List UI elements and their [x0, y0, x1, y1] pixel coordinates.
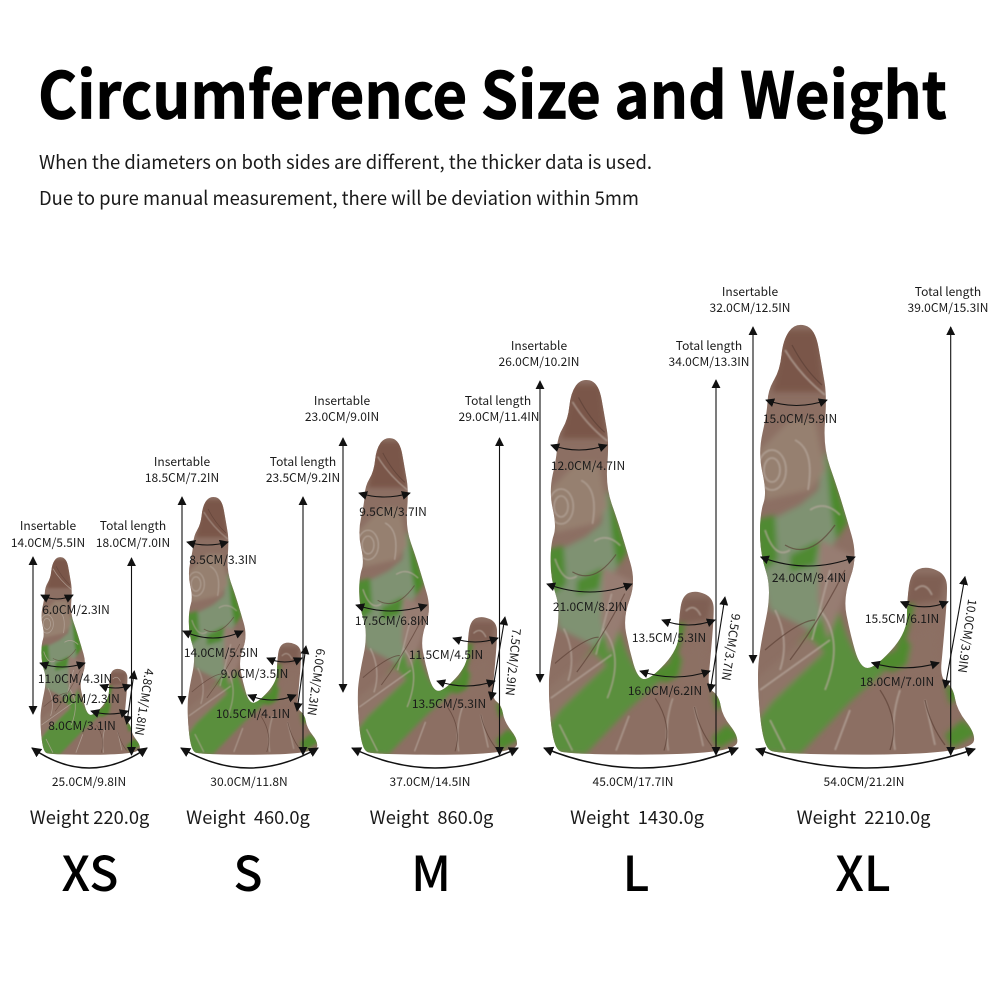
dimension labels: XS: 4.8CM/1.8IN	[131, 667, 158, 737]
panel: S size	[145, 453, 340, 905]
size letter: M: M	[411, 835, 451, 905]
dimension labels: XL: 15.0CM/5.9IN	[763, 410, 837, 427]
title: Circumference Size and Weight	[38, 46, 947, 138]
figure: L model	[542, 376, 747, 759]
dimension labels: M: 37.0CM/14.5IN	[390, 773, 470, 790]
dimension labels: S: 14.0CM/5.5IN	[184, 644, 258, 661]
figure: XL model	[750, 320, 985, 760]
dimension labels: L: 12.0CM/4.7IN	[551, 457, 625, 474]
size letter: XS: XS	[62, 835, 118, 905]
dimension labels: XS: 11.0CM/4.3IN	[38, 670, 112, 687]
subtitle notes: Due to pure manual measurement, there will be deviation within 5mm	[39, 184, 639, 211]
dimension labels: L: 16.0CM/6.2IN	[628, 682, 702, 699]
dimension labels: S: 6.0CM/2.3IN	[303, 647, 330, 717]
dimension labels: XL: Total length	[915, 283, 981, 300]
size letter: XL: XL	[835, 835, 891, 905]
panel: XL size	[710, 283, 988, 905]
dimension labels: XS: 6.0CM/2.3IN	[52, 690, 120, 707]
dimension labels: XS: 18.0CM/7.0IN	[96, 534, 170, 551]
dimension labels: XL: 32.0CM/12.5IN	[710, 299, 790, 316]
dimension labels: XS: 8.0CM/3.1IN	[48, 717, 116, 734]
dimension arrows: M	[343, 438, 518, 768]
dimension labels: XS: 25.0CM/9.8IN	[52, 773, 126, 790]
dimension arrows: XL	[753, 327, 975, 768]
dimension arrows: S	[181, 497, 318, 768]
dimension labels: XS: Total length	[100, 517, 166, 534]
dimension labels: S: 9.0CM/3.5IN	[221, 665, 288, 682]
panel: XS size	[11, 517, 170, 905]
panel: L size	[499, 337, 749, 905]
figure: XS model	[37, 555, 145, 757]
dimension labels: S: 18.5CM/7.2IN	[145, 469, 219, 486]
dimension labels: L: Total length	[676, 337, 742, 354]
dimension labels: XL: 39.0CM/15.3IN	[908, 299, 988, 316]
weight: XS: Weight 220.0g	[30, 804, 150, 830]
dimension labels: XS: 14.0CM/5.5IN	[11, 534, 85, 551]
size letter: L: L	[623, 835, 649, 905]
dimension labels: L: Insertable	[511, 337, 567, 354]
dimension labels: L: 26.0CM/10.2IN	[499, 353, 579, 370]
dimension arrows: XS	[32, 557, 147, 768]
dimension arrows: L	[540, 380, 738, 768]
size letter: S: S	[233, 835, 263, 905]
weight: XL: Weight 2210.0g	[797, 804, 931, 830]
dimension labels: M: 13.5CM/5.3IN	[412, 695, 486, 712]
dimension labels: S: 8.5CM/3.3IN	[189, 551, 257, 568]
dimension labels: M: 17.5CM/6.8IN	[355, 612, 429, 629]
dimension labels: L: 45.0CM/17.7IN	[593, 773, 673, 790]
dimension labels: L	[499, 337, 749, 790]
dimension labels: L: 21.0CM/8.2IN	[553, 598, 627, 615]
dimension labels: S	[145, 453, 340, 790]
weight: M: Weight 860.0g	[370, 804, 494, 830]
dimension labels: XL: 10.0CM/3.9IN	[954, 598, 981, 674]
dimension labels: XL	[710, 283, 988, 790]
dimension labels: L: 9.5CM/3.7IN	[718, 612, 745, 682]
subtitle notes	[39, 148, 652, 211]
weight: S: Weight 460.0g	[186, 804, 311, 830]
dimension labels: S: 23.5CM/9.2IN	[266, 469, 340, 486]
dimension labels: XS: 6.0CM/2.3IN	[42, 601, 110, 618]
dimension labels: M: 29.0CM/11.4IN	[459, 408, 539, 425]
dimension labels: S: 30.0CM/11.8N	[210, 773, 288, 790]
dimension labels: M: 9.5CM/3.7IN	[359, 503, 427, 520]
dimension labels: S: Total length	[270, 453, 336, 470]
subtitle notes: When the diameters on both sides are different, the thicker data is used.	[39, 148, 652, 175]
dimension labels: L: 34.0CM/13.3IN	[669, 353, 749, 370]
dimension labels: XS	[11, 517, 170, 790]
figure: M model	[352, 434, 525, 759]
figure: S model	[183, 494, 324, 758]
dimension labels: S: 10.5CM/4.1IN	[216, 705, 290, 722]
dimension labels: M	[305, 392, 539, 790]
dimension labels: XL: 18.0CM/7.0IN	[860, 673, 934, 690]
dimension labels: M: 11.5CM/4.5IN	[409, 646, 483, 663]
dimension labels: M: 7.5CM/2.9IN	[502, 628, 525, 697]
dimension labels: XL: Insertable	[722, 283, 778, 300]
dimension labels: XS: Insertable	[20, 517, 76, 534]
dimension labels: M: Insertable	[314, 392, 370, 409]
dimension labels: M: Total length	[465, 392, 531, 409]
dimension labels: M: 23.0CM/9.0IN	[305, 408, 379, 425]
dimension labels: XL: 54.0CM/21.2IN	[824, 773, 904, 790]
dimension labels: XL: 24.0CM/9.4IN	[772, 569, 846, 586]
dimension labels: XL: 15.5CM/6.1IN	[865, 610, 939, 627]
panel: M size	[305, 392, 539, 905]
dimension labels: S: Insertable	[154, 453, 210, 470]
dimension labels: L: 13.5CM/5.3IN	[632, 629, 706, 646]
weight: L: Weight 1430.0g	[570, 804, 705, 830]
